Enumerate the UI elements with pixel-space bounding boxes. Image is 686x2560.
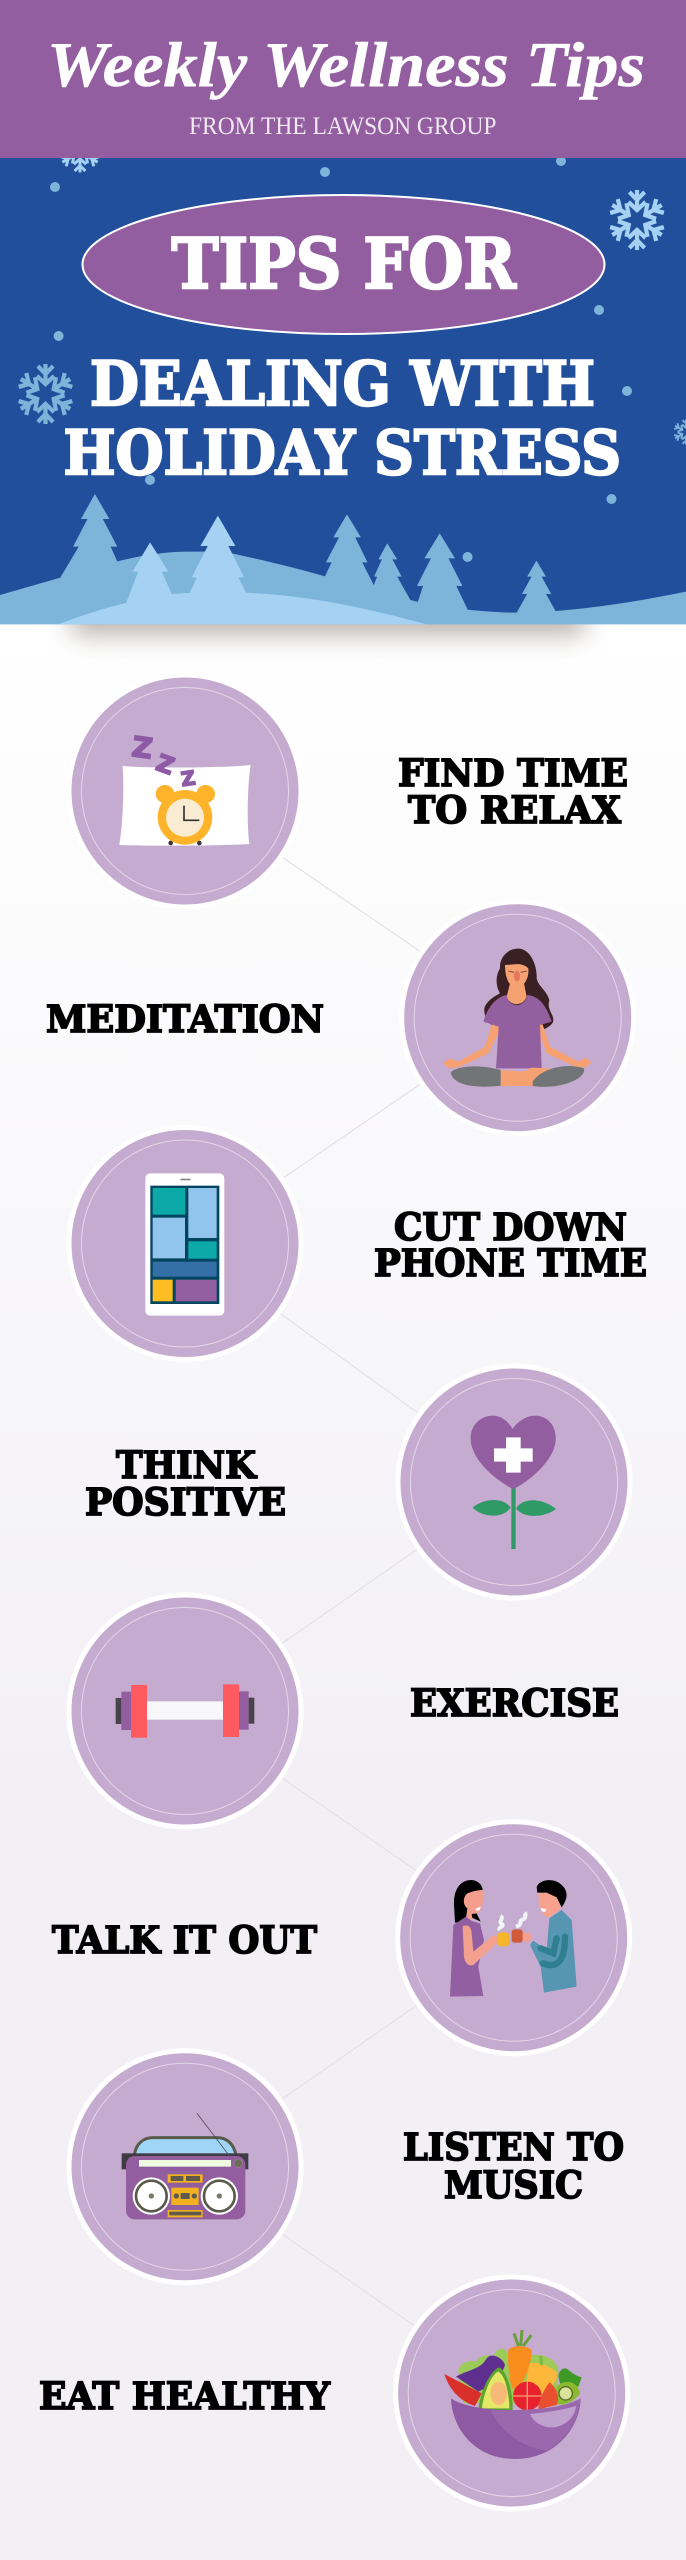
label: talk it out: TALK IT OUT xyxy=(52,1918,317,1962)
circle and ring xyxy=(69,675,301,907)
panel: header strip xyxy=(0,0,686,158)
label: cut down phone time xyxy=(374,1205,647,1285)
circle and ring xyxy=(398,1822,630,2054)
circle and ring xyxy=(402,902,634,1134)
tip 4: think positive xyxy=(398,1366,630,1598)
icon: pillow and alarm clock: Z xyxy=(180,766,197,791)
label: find time to relax xyxy=(398,751,628,832)
circle and ring xyxy=(398,1366,630,1598)
label: listen to music xyxy=(403,2125,624,2207)
label: think positive: POSITIVE xyxy=(85,1480,286,1524)
icon: pillow and alarm clock: Z xyxy=(130,730,155,766)
label: find time to relax: TO RELAX xyxy=(408,788,621,832)
snowy hills and pine trees xyxy=(0,494,686,624)
icon: dumbbell xyxy=(116,1684,254,1738)
title ellipse xyxy=(82,195,604,334)
tip 3: cut down phone time xyxy=(69,1128,301,1360)
label: cut down phone time: PHONE TIME xyxy=(374,1241,647,1285)
snow dots xyxy=(50,156,632,562)
label: listen to music: LISTEN TO xyxy=(403,2125,624,2169)
heading: tips for: TIPS FOR xyxy=(172,224,517,305)
icon: pillow and alarm clock xyxy=(119,730,251,846)
label: exercise: EXERCISE xyxy=(410,1681,619,1725)
label: think positive: THINK xyxy=(116,1443,258,1487)
icon: smartphone xyxy=(145,1173,224,1316)
circle and ring xyxy=(69,2051,301,2283)
tip 8: eat healthy xyxy=(396,2277,628,2509)
main title: Weekly Wellness Tips xyxy=(47,30,645,100)
tip 5: exercise xyxy=(69,1595,301,1827)
label: meditation: MEDITATION xyxy=(46,997,324,1041)
banner drop shadow xyxy=(72,592,584,634)
circle and ring xyxy=(396,2277,628,2509)
connector lines xyxy=(185,791,518,2393)
icon: bowl of vegetables xyxy=(444,2330,582,2459)
subtitle: FROM THE LAWSON GROUP xyxy=(189,113,496,140)
icon: boombox xyxy=(122,2113,248,2219)
icon: two people with mugs xyxy=(450,1880,577,1997)
heading: holiday stress: HOLIDAY STRESS xyxy=(64,418,621,489)
tip 1: find time to relax xyxy=(69,675,301,907)
label: cut down phone time: CUT DOWN xyxy=(394,1205,627,1249)
circle and ring xyxy=(69,1595,301,1827)
panel: winter scene banner xyxy=(0,132,686,624)
circle and ring xyxy=(69,1128,301,1360)
label: eat healthy: EAT HEALTHY xyxy=(39,2374,331,2418)
heading: dealing with: DEALING WITH xyxy=(90,349,595,420)
label: listen to music: MUSIC xyxy=(444,2163,583,2207)
tip 6: talk it out xyxy=(398,1822,630,2054)
tip 7: listen to music xyxy=(69,2051,301,2283)
label: think positive xyxy=(85,1443,286,1524)
label: find time to relax: FIND TIME xyxy=(398,751,628,795)
tip 2: meditation xyxy=(402,902,634,1134)
icon: woman meditating xyxy=(443,949,592,1087)
icon: heart flower xyxy=(471,1416,556,1549)
icon: snowflakes xyxy=(17,132,686,445)
icon: pillow and alarm clock: Z xyxy=(153,748,178,781)
